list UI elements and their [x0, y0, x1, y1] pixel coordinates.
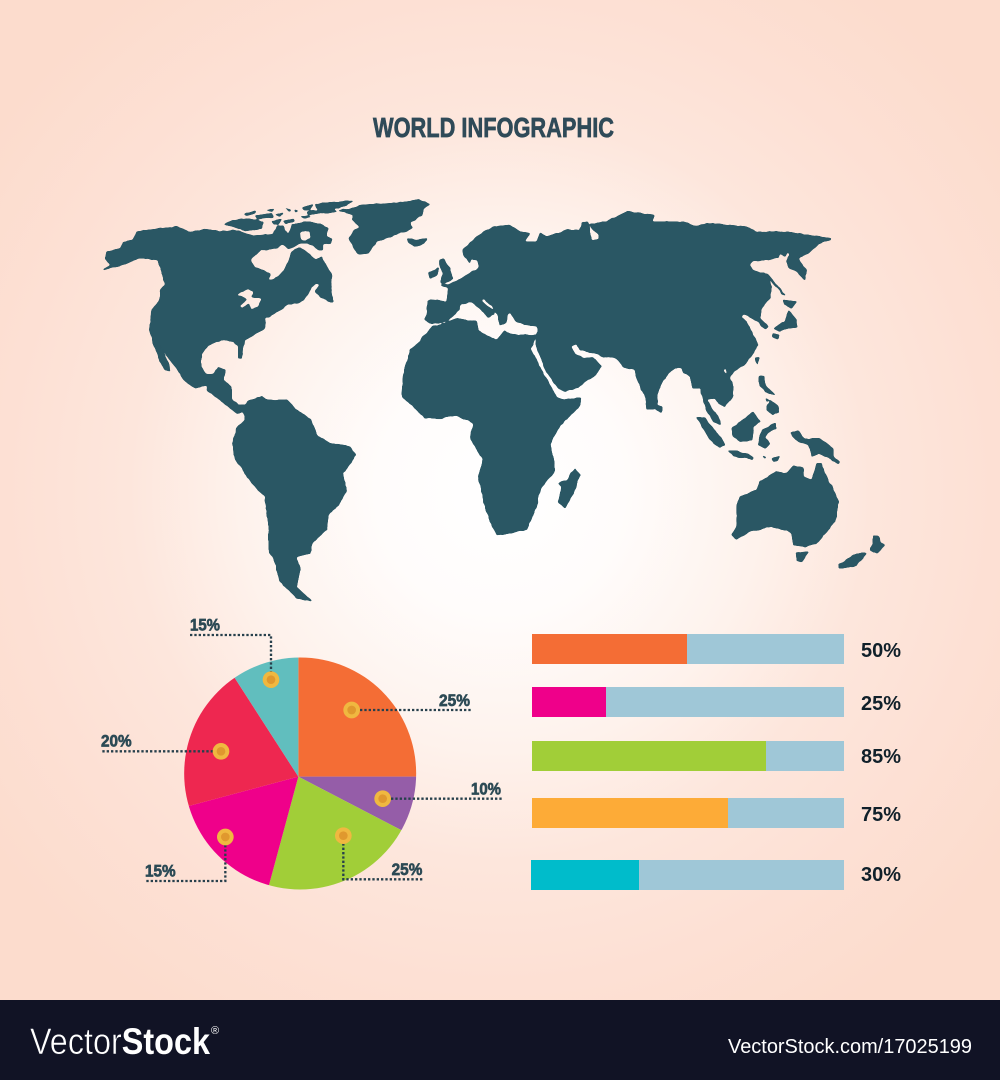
bar: 30%	[531, 860, 901, 890]
slice: green	[269, 776, 402, 890]
pie labels: 20%	[101, 732, 132, 751]
bar: 75%	[532, 798, 901, 828]
Greenland	[338, 200, 430, 254]
footer band	[0, 1000, 1000, 1080]
bar: 75%: 75%	[861, 804, 901, 826]
bar: 25%: 25%	[861, 693, 901, 715]
Madagascar	[558, 468, 580, 508]
footer image id: VectorStock.com/17025199	[728, 1036, 972, 1058]
New Guinea	[790, 431, 840, 464]
world map	[102, 200, 885, 601]
bar chart	[531, 634, 901, 890]
slice: purple	[298, 776, 416, 830]
pie labels: 15%	[190, 616, 220, 635]
registered mark: ®	[211, 1025, 219, 1037]
North and South America	[102, 222, 356, 601]
bar: 50%	[532, 634, 901, 664]
map: the Americas and Greenland	[102, 200, 430, 601]
slice: teal	[234, 658, 298, 776]
leader lines	[102, 635, 502, 881]
Africa	[402, 318, 582, 535]
New Zealand	[838, 536, 885, 568]
bar: 85%	[532, 741, 901, 771]
bar: 25%	[532, 687, 901, 717]
pie labels: 25%	[392, 860, 422, 879]
pie chart	[101, 618, 502, 890]
slice: red	[184, 678, 298, 806]
Iceland	[407, 238, 427, 247]
map: Eurasia, Africa and Oceania	[402, 212, 885, 568]
Japan and Taiwan	[755, 273, 797, 365]
British Isles	[428, 258, 453, 283]
pie labels	[101, 616, 501, 881]
pie labels: 10%	[471, 779, 501, 798]
pie labels: 15%	[145, 862, 176, 881]
title: WORLD INFOGRAPHIC	[373, 112, 614, 143]
Arctic islands	[223, 201, 353, 231]
footer logo: VectorStock	[30, 1021, 210, 1062]
pie labels: 25%	[439, 691, 470, 710]
Australia and Tasmania	[732, 463, 839, 562]
bar: 85%: 85%	[861, 746, 901, 768]
Southeast Asian islands	[697, 376, 779, 462]
pie slices	[184, 658, 416, 890]
Eurasia	[425, 212, 831, 425]
bar: 50%: 50%	[861, 640, 901, 662]
slice: orange	[298, 658, 416, 777]
slice: magenta	[188, 776, 298, 886]
bar: 30%: 30%	[861, 864, 901, 886]
marker dots	[213, 671, 391, 845]
